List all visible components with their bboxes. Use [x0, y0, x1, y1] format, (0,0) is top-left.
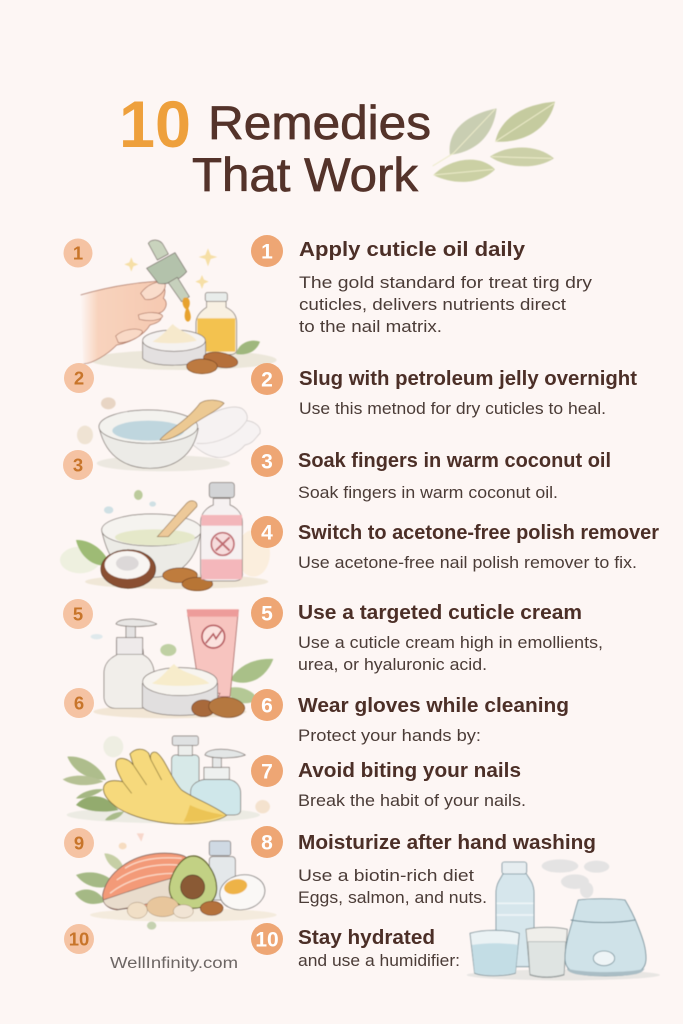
left number badges: 2	[74, 368, 84, 388]
remedy 8 text: Eggs, salmon, and nuts.	[298, 889, 487, 907]
remedy 4 text: Switch to acetone-free polish remover	[298, 522, 659, 544]
icon: hand	[81, 281, 166, 364]
remedy 8 text: Moisturize after hand washing	[298, 832, 596, 854]
title: Remedies	[208, 96, 431, 149]
remedy 5 text: Use a cuticle cream high in emollients,	[298, 634, 603, 652]
left number badges: 6	[74, 692, 84, 714]
icon: glove	[104, 749, 227, 824]
icon: leaves	[230, 659, 273, 683]
icon: leaves	[67, 756, 106, 780]
right number badges: 10	[255, 928, 279, 952]
icon: glass of water	[470, 930, 519, 976]
icon: steam	[542, 859, 609, 898]
icon: oil bottle	[196, 293, 237, 355]
icon: egg	[217, 871, 268, 913]
left number badges: 9	[74, 832, 84, 854]
icon: bottle	[172, 755, 199, 798]
remedy 7 text	[298, 760, 526, 810]
remedy 10 text: and use a humidifier:	[298, 952, 460, 970]
icon: leaves	[433, 102, 555, 182]
icon: almonds	[202, 350, 239, 370]
illustration: gloves, bottles	[63, 736, 270, 824]
remedy 3 text: Soak fingers in warm coconut oil.	[298, 484, 558, 502]
remedy 7 text: Break the habit of your nails.	[298, 792, 526, 810]
illustration: water bottle, glasses, humidifier	[467, 859, 660, 980]
right number badges: 3	[261, 450, 273, 474]
icon: humidifier	[565, 899, 646, 976]
title: That Work	[192, 148, 419, 201]
icon: water bottle	[496, 873, 534, 967]
remedy 10 text: Stay hydrated	[298, 927, 435, 949]
title: 10	[119, 87, 191, 161]
left number badges: 10	[69, 928, 89, 950]
title	[119, 87, 431, 201]
icon: leaf	[236, 341, 260, 354]
remedy 2 text	[299, 368, 637, 418]
remedy 8 text: Use a biotin-rich diet	[298, 867, 474, 885]
watermark: WellInfinity.com	[110, 955, 238, 972]
left number badges: 5	[73, 604, 83, 624]
icon: glass	[526, 927, 567, 977]
icon: bowl	[102, 532, 201, 577]
icon: salmon	[103, 853, 186, 910]
icon: dropper	[148, 240, 168, 260]
remedy 1 text	[299, 239, 593, 336]
icon: coconut	[101, 550, 156, 588]
remedy 5 text	[298, 602, 603, 674]
icon: sparkles	[124, 248, 217, 289]
illustration: salmon, avocado, egg, nuts	[75, 833, 277, 930]
remedy 8 text	[298, 832, 596, 907]
remedy 6 text: Protect your hands by:	[298, 727, 481, 745]
remedy 3 text	[298, 450, 611, 502]
icon: cloth	[183, 407, 260, 458]
icon: tube	[187, 610, 238, 697]
icon: remover bottle	[201, 498, 242, 581]
remedy 4 text: Use acetone-free nail polish remover to fix.	[298, 554, 637, 572]
right number badges: 4	[261, 522, 273, 544]
icon: bottle	[209, 857, 235, 900]
remedy 5 text: urea, or hyaluronic acid.	[298, 656, 487, 674]
illustration: pump bottle, tube, cream jar	[91, 609, 273, 719]
illustration: coconut oil bowl, polish remover	[60, 483, 270, 591]
remedy 10 text	[298, 927, 460, 970]
icon: spoon	[157, 501, 197, 537]
remedy 1 text: The gold standard for treat tirg dry	[299, 274, 593, 292]
remedy 7 text: Avoid biting your nails	[298, 760, 521, 782]
remedy 1 text: to the nail matrix.	[299, 318, 442, 336]
icon: pump bottle	[104, 640, 154, 708]
icon: leaf	[76, 540, 110, 566]
icon: nuts	[127, 902, 147, 918]
icon: cream jar	[143, 342, 206, 365]
remedy 6 text: Wear gloves while cleaning	[298, 695, 569, 717]
remedy 2 text: Slug with petroleum jelly overnight	[299, 368, 637, 390]
right number badges: 5	[261, 602, 273, 626]
right number badges	[251, 235, 283, 955]
left number badges: 1	[73, 242, 83, 264]
right number badges: 1	[261, 240, 273, 264]
right number badges: 2	[261, 368, 273, 392]
remedy 1 text: cuticles, delivers nutrients direct	[299, 296, 566, 314]
remedy 4 text	[298, 522, 659, 572]
remedy 2 text: Use this metnod for dry cuticles to heal.	[299, 400, 606, 418]
remedy 5 text: Use a targeted cuticle cream	[298, 602, 582, 624]
remedy 6 text	[298, 695, 569, 745]
remedy 1 text: Apply cuticle oil daily	[299, 239, 526, 261]
icon: cream jar	[142, 683, 218, 715]
left number badges	[63, 238, 94, 954]
icon: leaves	[104, 853, 124, 872]
remedy 3 text: Soak fingers in warm coconut oil	[298, 450, 611, 472]
right number badges: 7	[261, 760, 273, 784]
icon: pump bottle	[191, 779, 241, 815]
icon: almonds	[163, 568, 197, 583]
icon: spatula	[160, 400, 224, 440]
icon: bowl	[99, 428, 198, 468]
illustration: bowl, spatula, cloth	[77, 397, 260, 471]
icon: almonds	[192, 700, 215, 717]
left number badges: 3	[73, 454, 83, 476]
right number badges: 8	[261, 832, 273, 854]
icon: avocado	[169, 856, 217, 908]
right number badges: 6	[261, 694, 273, 718]
illustration: cuticle oil, dropper, hand, jar	[81, 240, 277, 374]
